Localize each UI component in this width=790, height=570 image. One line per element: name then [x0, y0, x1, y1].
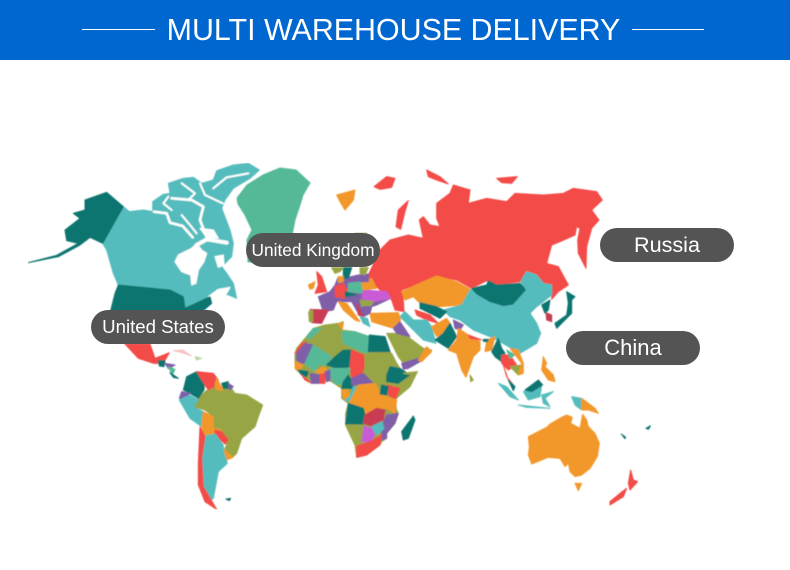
label: China: China [604, 335, 662, 360]
map: North America [28, 163, 259, 313]
header banner [0, 0, 790, 60]
map: Europe base [330, 275, 391, 317]
label: China [566, 331, 700, 365]
map: Africa base [295, 322, 417, 457]
label: United Kingdom: United Kingdom [252, 240, 374, 260]
map: Greenland [237, 168, 310, 262]
map: Southeast Asia and Oceania [468, 335, 651, 505]
label: Russia [600, 228, 734, 262]
label: United States: United States [102, 316, 214, 337]
label: Russia: Russia [634, 232, 700, 257]
map: world landmasses [28, 163, 651, 509]
map: Latin America [125, 344, 263, 509]
map: Eurasia [308, 170, 602, 353]
map: Africa and Middle East [295, 322, 480, 457]
label: United Kingdom [246, 233, 380, 267]
title: MULTI WAREHOUSE DELIVERY [167, 13, 620, 47]
label: United States [91, 310, 225, 344]
